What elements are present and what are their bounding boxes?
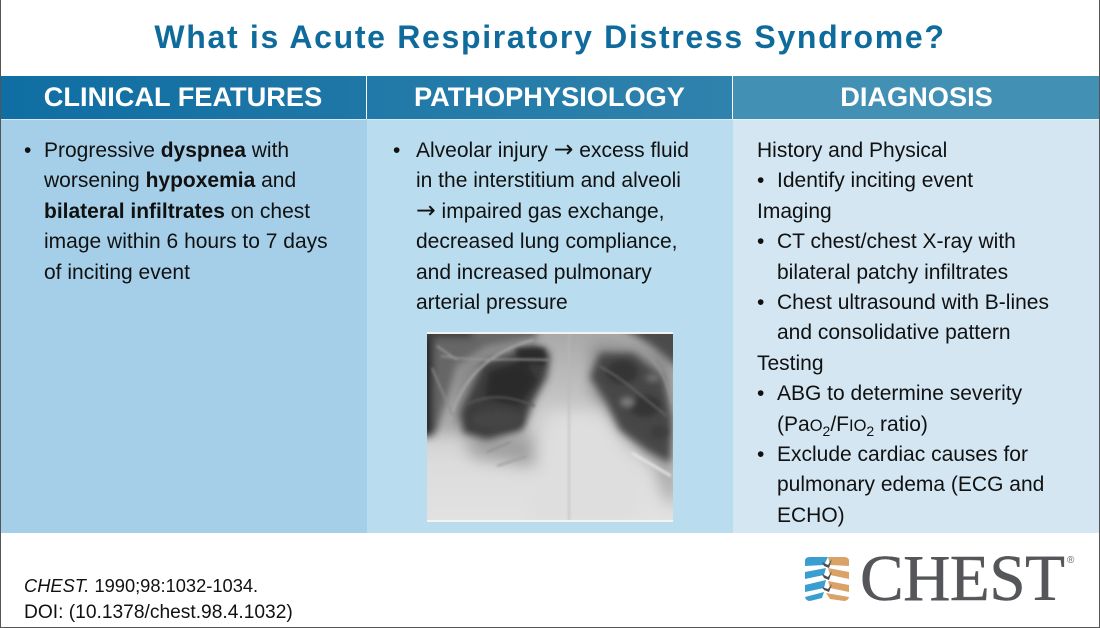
diagnosis text list: • (757, 169, 764, 192)
registered mark: ® (1067, 555, 1074, 566)
bullet text: clinical features: Progressive dyspnea with (44, 139, 289, 162)
panel header: clinical features (0, 76, 366, 120)
logo wordmark: CHEST (860, 543, 1064, 615)
diagnosis text list: bilateral patchy infiltrates (777, 261, 1008, 284)
panel header: clinical features: CLINICAL FEATURES (44, 81, 322, 112)
citation: DOI: (10.1378/chest.98.4.1032) (24, 602, 293, 623)
diagnosis text list: History and Physical (757, 139, 947, 162)
bullet text: clinical features: bilateral infiltrates on chest (44, 200, 310, 223)
bullet text: clinical features: • (24, 139, 31, 162)
bullet text: pathophysiology: decreased lung compliance, (416, 230, 678, 253)
bullet text: pathophysiology: • (393, 139, 400, 162)
bullet text: pathophysiology (393, 135, 689, 314)
title: What is Acute Respiratory Distress Syndrome? (154, 19, 946, 55)
citation (24, 575, 293, 623)
icon: CHEST ribs mark (805, 557, 849, 601)
diagnosis text list: Exclude cardiac causes for (777, 443, 1028, 466)
panel header: pathophysiology: PATHOPHYSIOLOGY (414, 81, 685, 112)
bullet text: clinical features (24, 139, 328, 284)
panel: diagnosis (733, 119, 1100, 533)
logo: CHEST (805, 543, 1074, 615)
chest x-ray image (427, 332, 673, 522)
diagnosis text list: • (757, 382, 764, 405)
panel: clinical features (0, 119, 367, 533)
diagnosis text list: CT chest/chest X-ray with (777, 230, 1016, 253)
panel header: pathophysiology (367, 76, 732, 120)
diagnosis text list: ECHO) (777, 504, 845, 527)
bullet text: pathophysiology: → impaired gas exchange, (416, 196, 665, 224)
diagnosis text list: and consolidative pattern (777, 321, 1010, 344)
bullet text: pathophysiology: Alveolar injury → excess fluid (416, 135, 689, 163)
diagnosis text list: Identify inciting event (777, 169, 973, 192)
bullet text: pathophysiology: in the interstitium and alveoli (416, 169, 681, 192)
diagnosis text list (757, 139, 1049, 527)
diagnosis text list: Chest ultrasound with B-lines (777, 291, 1049, 314)
diagnosis text list: • (757, 443, 764, 466)
bullet text: clinical features: worsening hypoxemia and (44, 169, 296, 192)
bullet text: pathophysiology: arterial pressure (416, 291, 568, 314)
diagnosis text list: Imaging (757, 200, 832, 223)
panel header: diagnosis (733, 76, 1100, 120)
panel header: diagnosis: DIAGNOSIS (840, 81, 993, 112)
bullet text: clinical features: image within 6 hours to 7 days (44, 230, 328, 253)
panel: pathophysiology (367, 119, 733, 533)
bullet text: clinical features: of inciting event (44, 261, 190, 284)
bullet text: pathophysiology: and increased pulmonary (416, 261, 652, 284)
diagnosis text list: • (757, 291, 764, 314)
diagnosis text list: ABG to determine severity (777, 382, 1022, 405)
diagnosis text list: • (757, 230, 764, 253)
diagnosis text list: (PaO2/FIO2 ratio) (777, 413, 928, 439)
diagnosis text list: Testing (757, 352, 824, 375)
citation: CHEST. 1990;98:1032-1034. (24, 575, 258, 596)
diagnosis text list: pulmonary edema (ECG and (777, 473, 1044, 496)
